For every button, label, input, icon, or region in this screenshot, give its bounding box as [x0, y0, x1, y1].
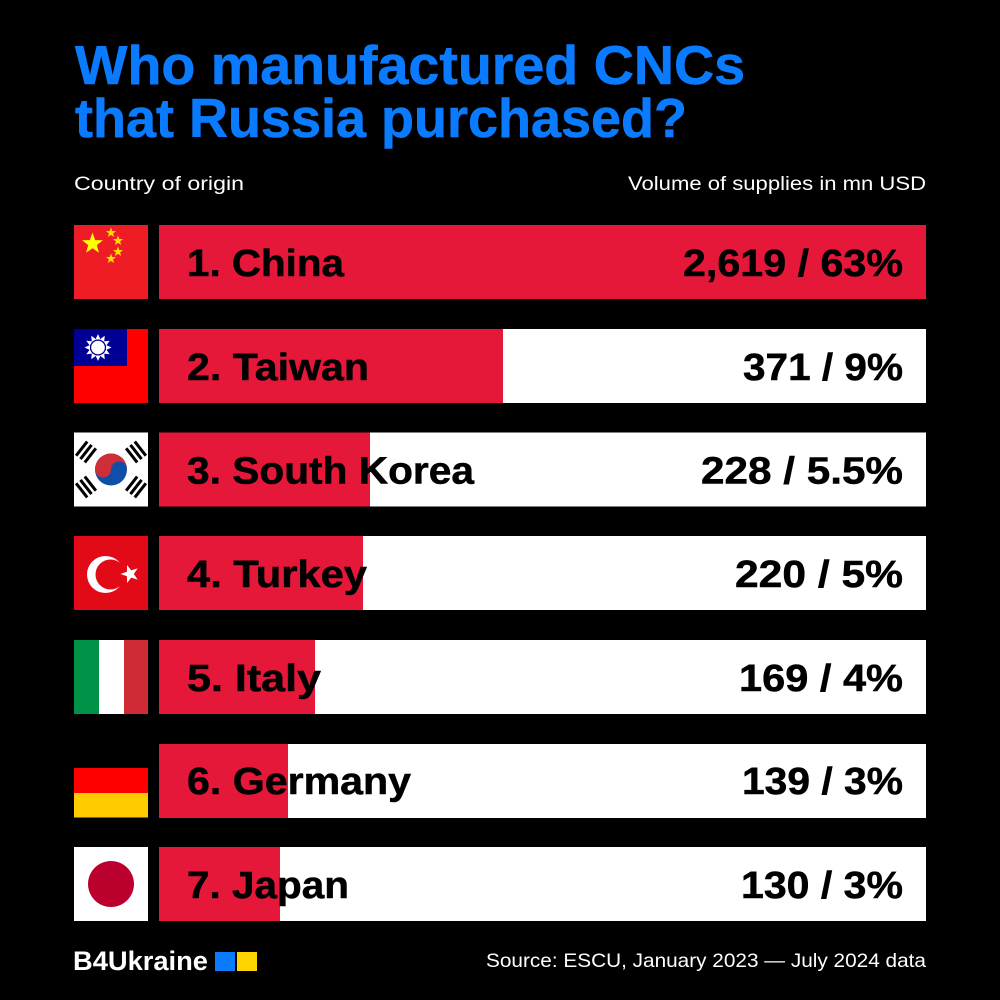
row 2: Taiwan [74, 329, 926, 403]
flag: Turkey [74, 536, 148, 610]
bar: Germany 3% [159, 744, 288, 818]
flag: Japan [74, 847, 148, 921]
source note: Source: ESCU, January 2023 — July 2024 data [486, 950, 926, 972]
title [75, 34, 745, 149]
column heading: volume of supplies: Volume of supplies in mn USD [628, 173, 926, 195]
bar: Turkey background [159, 536, 926, 610]
value: Turkey: 220 / 5% [735, 554, 903, 596]
label: Taiwan: 2. Taiwan [187, 347, 369, 389]
bar: Taiwan 9% [159, 329, 503, 403]
flag: Taiwan [74, 329, 148, 403]
logo: B4Ukraine: B4Ukraine [73, 946, 208, 976]
flag: China [74, 225, 148, 299]
label: Germany: 6. Germany [187, 761, 411, 803]
column heading: country of origin: Country of origin [74, 173, 244, 195]
label: China: 1. China [187, 243, 345, 285]
value: Taiwan: 371 / 9% [743, 347, 903, 389]
value: Italy: 169 / 4% [739, 658, 903, 700]
bar: Italy background [159, 640, 926, 714]
label: Turkey: 4. Turkey [187, 554, 367, 596]
row 4: Turkey [74, 536, 926, 610]
label: Italy: 5. Italy [187, 658, 321, 700]
bar: Turkey 5% [159, 536, 363, 610]
value: South Korea: 228 / 5.5% [701, 450, 903, 492]
value: Germany: 139 / 3% [742, 761, 903, 803]
title: Who manufactured CNCs [75, 34, 745, 96]
flag: Germany [74, 768, 148, 818]
bar: South Korea background [159, 432, 926, 506]
title: that Russia purchased? [75, 87, 687, 149]
row 3: South Korea [74, 432, 926, 506]
row 6: Germany [74, 744, 926, 818]
bar: Germany background [159, 744, 926, 818]
bar: Japan 3% [159, 847, 280, 921]
value: China: 2,619 / 63% [683, 243, 903, 285]
bar: Taiwan background [159, 329, 926, 403]
bar: Italy 4% [159, 640, 315, 714]
row 1: China [74, 225, 926, 299]
label: South Korea: 3. South Korea [187, 450, 475, 492]
row 7: Japan [74, 847, 926, 921]
flag: South Korea [74, 432, 148, 506]
bar: Japan background [159, 847, 926, 921]
bar: South Korea 5.5% [159, 432, 370, 506]
value: Japan: 130 / 3% [741, 865, 903, 907]
flag: Italy [74, 640, 148, 714]
bar: China 63% [159, 225, 926, 299]
label: Japan: 7. Japan [187, 865, 349, 907]
row 5: Italy [74, 640, 926, 714]
